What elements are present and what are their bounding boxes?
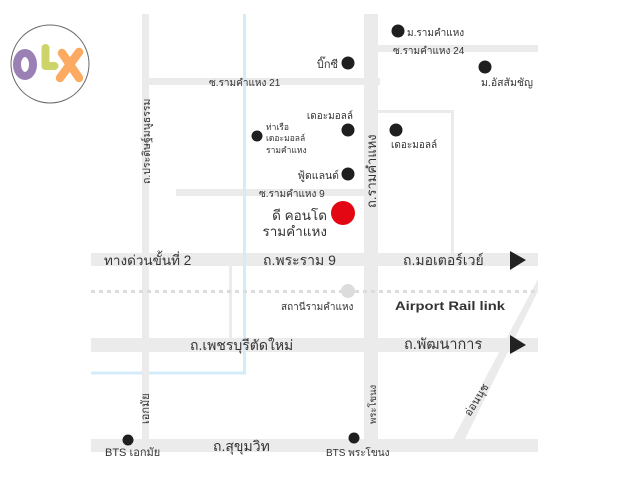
project name xyxy=(262,207,327,239)
map labels: อ่อนนุช xyxy=(462,382,491,419)
map labels: ถ.รามคำแหง xyxy=(364,134,379,208)
map labels: ถ.ประดิษฐ์มนูธรรม xyxy=(140,99,153,184)
map labels: สถานีรามคำแหง xyxy=(281,301,354,313)
logo: OLX xyxy=(11,25,89,103)
map labels: ถ.มอเตอร์เวย์ xyxy=(403,252,484,268)
map labels: ทางด่วนขั้นที่ 2 xyxy=(104,250,191,268)
map labels: BTS เอกมัย xyxy=(105,447,160,459)
map labels: ถ.สุขุมวิท xyxy=(213,438,270,455)
map labels: ซ.รามคำแหง 9 xyxy=(259,189,325,200)
landmark markers xyxy=(122,24,492,446)
map labels: ถ.พระราม 9 xyxy=(263,252,336,268)
map labels: เดอะมอลล์ xyxy=(391,139,437,151)
map labels: เอกมัย xyxy=(140,393,152,424)
map labels: Airport Rail link xyxy=(395,301,506,313)
canal: blue line xyxy=(91,14,244,373)
project name: รามคำแหง xyxy=(262,224,327,239)
map labels: BTS พระโขนง xyxy=(326,446,390,459)
map labels: เดอะมอลล์ xyxy=(307,110,353,122)
project name: ดี คอนโด xyxy=(272,207,327,223)
map labels: ซ.รามคำแหง 21 xyxy=(209,78,281,89)
road network xyxy=(91,14,538,453)
map labels: เดอะมอลล์ xyxy=(266,133,305,143)
arrow: motorway xyxy=(510,251,526,270)
map labels: พระโขนง xyxy=(367,385,379,424)
road crossing over canal xyxy=(142,371,149,375)
station marker xyxy=(341,284,355,298)
map labels xyxy=(104,28,533,459)
map labels: ฟู้ดแลนด์ xyxy=(298,169,339,182)
map labels: รามคำแหง xyxy=(266,145,307,155)
map labels: บิ๊กซี xyxy=(317,56,339,71)
map labels: ถ.เพชรบุรีตัดใหม่ xyxy=(190,337,293,354)
map labels: ซ.รามคำแหง 24 xyxy=(393,46,465,57)
map labels: ม.อัสสัมชัญ xyxy=(481,77,533,89)
arrow: pattanakarn xyxy=(510,335,526,354)
map labels: ท่าเรือ xyxy=(266,122,289,132)
map labels: ถ.พัฒนาการ xyxy=(404,337,482,353)
airport rail link: dotted line xyxy=(91,290,538,293)
map labels: ม.รามคำแหง xyxy=(407,28,464,39)
landmark: project marker xyxy=(331,201,355,225)
